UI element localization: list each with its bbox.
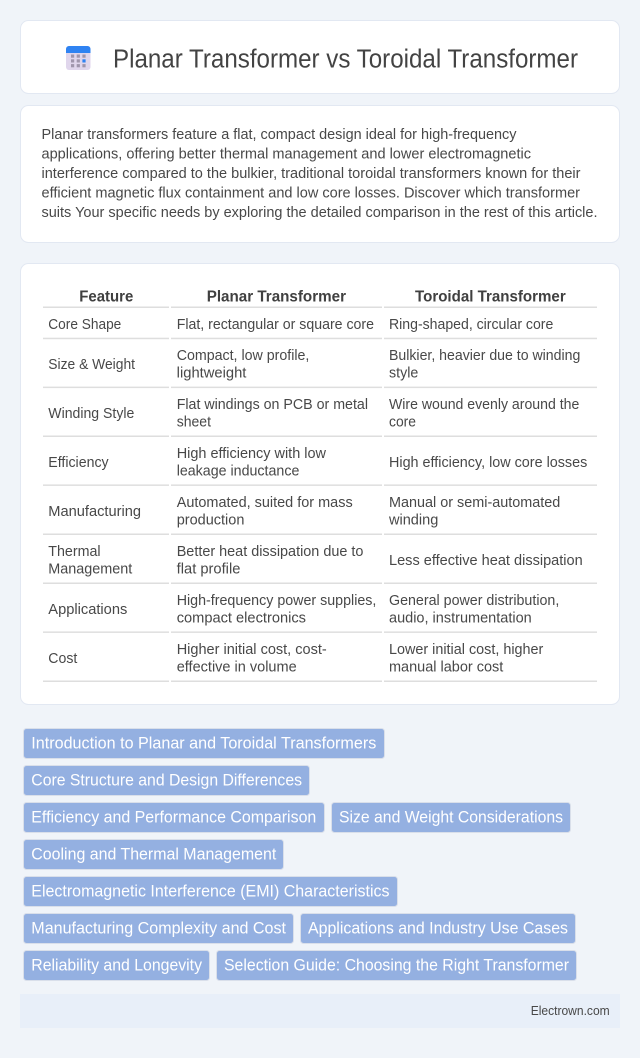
panel: introduction	[20, 106, 620, 242]
tag: selection guide: Selection Guide: Choosing the Right Transformer	[224, 956, 570, 974]
row: core shape: Flat, rectangular or square core	[177, 317, 374, 333]
intro text block	[42, 127, 598, 221]
tag: core structure: Core Structure and Design Differences	[31, 772, 302, 790]
row: manufacturing	[48, 495, 560, 529]
tag: selection guide	[216, 950, 576, 980]
row: size and weight: lightweight	[177, 366, 246, 382]
row: size and weight: Compact, low profile,	[177, 348, 309, 364]
row: size and weight: style	[389, 366, 418, 382]
intro text block: interference compared to the bulkier, traditional toroidal transformers known for their	[42, 166, 581, 182]
row: thermal management: flat profile	[177, 562, 240, 578]
tag: reliability	[24, 950, 210, 980]
row: winding style: Flat windings on PCB or metal	[177, 397, 368, 413]
intro text block: efficient magnetic flux containment and low core losses. Discover which transformer	[42, 186, 580, 202]
row: cost	[48, 642, 543, 676]
row: winding style: sheet	[177, 415, 211, 431]
tag: manufacturing	[24, 914, 294, 944]
row: efficiency: Efficiency	[48, 455, 109, 471]
table header row	[79, 289, 566, 306]
row: efficiency: High efficiency with low	[177, 446, 326, 462]
row: thermal management	[48, 544, 583, 578]
tag: applications: Applications and Industry Use Cases	[308, 920, 568, 938]
row: winding style	[48, 397, 579, 431]
tag: introduction: Introduction to Planar and Toroidal Transformers	[31, 734, 376, 752]
topic tags	[24, 728, 576, 980]
row: thermal management: Thermal	[48, 544, 101, 560]
row: thermal management: Management	[48, 562, 132, 578]
title: Planar Transformer vs Toroidal Transformer	[113, 46, 578, 74]
tag: efficiency: Efficiency and Performance Comparison	[31, 808, 316, 826]
footer	[20, 994, 620, 1028]
row: thermal management: Better heat dissipation due to	[177, 544, 363, 560]
tag: core structure	[24, 766, 310, 796]
row: manufacturing: Manufacturing	[48, 504, 141, 520]
row: cost: manual labor cost	[389, 660, 503, 676]
row: efficiency: leakage inductance	[177, 464, 299, 480]
row: applications: General power distribution,	[389, 593, 559, 609]
row: thermal management: Less effective heat dissipation	[389, 553, 583, 569]
row: manufacturing: winding	[388, 513, 438, 529]
tag: introduction	[24, 728, 384, 758]
row: size and weight	[48, 348, 580, 382]
tag: cooling: Cooling and Thermal Management	[31, 846, 277, 864]
row: efficiency	[48, 446, 587, 480]
row: efficiency: High efficiency, low core losses	[389, 455, 587, 471]
row: size and weight: Size & Weight	[48, 357, 135, 373]
panel: comparison table	[20, 264, 620, 704]
table header row: Feature	[79, 289, 133, 306]
row: cost: Lower initial cost, higher	[389, 642, 543, 658]
tag: emi: Electromagnetic Interference (EMI) Characteristics	[31, 882, 390, 900]
intro text block: suits Your specific needs by exploring the detailed comparison in the rest of this article.	[42, 205, 598, 221]
tag: size and weight	[332, 802, 570, 832]
footer: Electrown.com	[531, 1003, 610, 1018]
row: size and weight: Bulkier, heavier due to winding	[389, 348, 580, 364]
row: winding style: Wire wound evenly around the	[389, 397, 579, 413]
row: cost: Cost	[48, 651, 77, 667]
row: winding style: core	[389, 415, 416, 431]
row: cost: Higher initial cost, cost-	[177, 642, 327, 658]
tag: emi	[24, 876, 398, 906]
row: applications: audio, instrumentation	[389, 611, 532, 627]
row: applications: compact electronics	[177, 611, 306, 627]
row: winding style: Winding Style	[48, 406, 134, 422]
tag: cooling	[24, 840, 284, 870]
row: cost: effective in volume	[177, 660, 297, 676]
table header row: Toroidal Transformer	[415, 289, 566, 306]
icon: calendar	[66, 46, 90, 70]
intro text block: applications, offering better thermal management and lower electromagnetic	[42, 147, 532, 163]
row: applications: Applications	[48, 602, 127, 618]
tag: manufacturing: Manufacturing Complexity and Cost	[31, 920, 286, 938]
row: manufacturing: Automated, suited for mass	[177, 495, 353, 511]
tag: reliability: Reliability and Longevity	[31, 956, 203, 974]
tag: size and weight: Size and Weight Considerations	[339, 808, 563, 826]
tag: applications	[300, 914, 576, 944]
row: core shape	[48, 317, 553, 333]
row: applications: High-frequency power supplies,	[177, 593, 376, 609]
table header row: Planar Transformer	[207, 289, 346, 306]
row: applications	[48, 593, 559, 627]
tag: efficiency	[24, 802, 324, 832]
row: core shape: Ring-shaped, circular core	[389, 317, 553, 333]
row: manufacturing: production	[177, 513, 244, 529]
row: manufacturing: Manual or semi-automated	[389, 495, 560, 511]
header panel	[20, 20, 620, 94]
row: core shape: Core Shape	[48, 317, 121, 333]
intro text block: Planar transformers feature a flat, compact design ideal for high-frequency	[42, 127, 517, 143]
